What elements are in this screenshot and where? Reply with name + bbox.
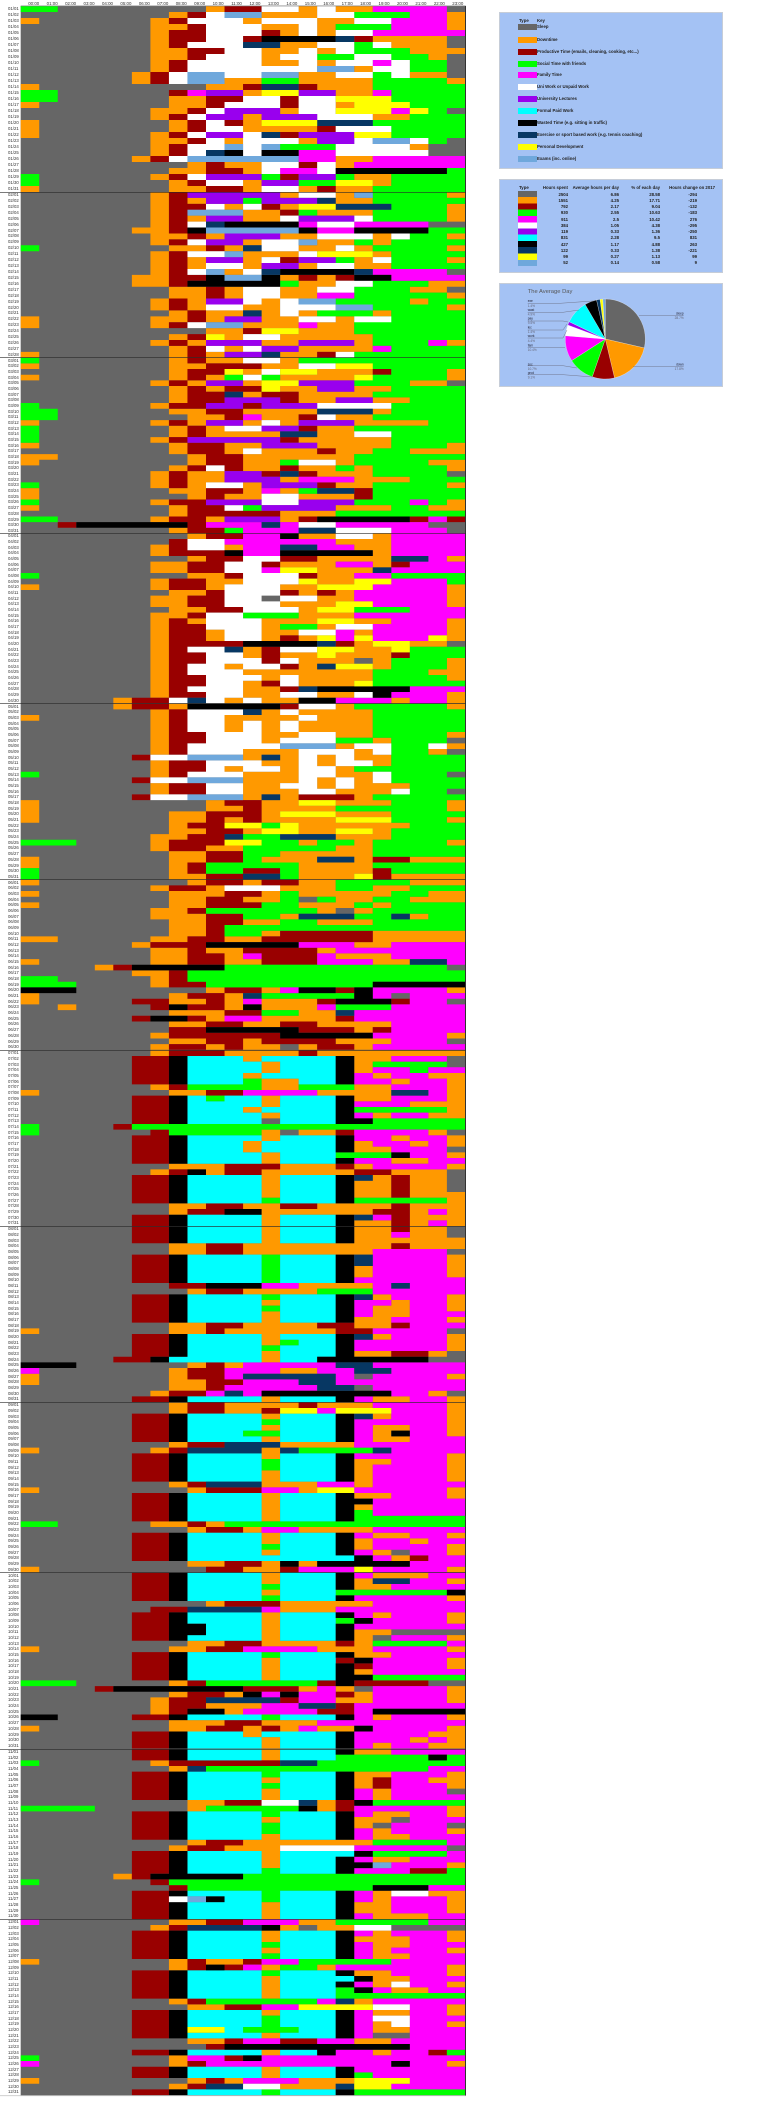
key entries: Formal Paid Work [537, 108, 573, 113]
table values [558, 192, 697, 265]
pie callout labels: 1.4% [528, 330, 535, 334]
date labels: February: 02/01 02/02 02/03 02/04 02/05 02/06 02/07 02/08 02/09 02/10 02/11 02/12 02/13 02/14 02/15 02/16 02/17 02/18 02/19 02/20 02/21 02/22 02/23 02/24 02/25 02/26 02/27 02/28 [8, 192, 19, 357]
pie callout labels: pay [528, 317, 533, 321]
table values: 6.86 4.25 2.17 2.55 2.5 1.05 0.33 2.28 1.17 0.33 0.27 0.14 [611, 192, 619, 265]
hour labels header: 23:00 [452, 1, 463, 6]
table values: -294 -219 -132 -183 276 -295 -250 831 263 -221 99 9 [688, 192, 697, 265]
pie callout labels: 1.4% [528, 304, 535, 308]
hour labels header: 18:00 [360, 1, 371, 6]
hour labels header: 06:00 [139, 1, 150, 6]
April rows [21, 536, 465, 701]
date labels: October: 10/01 10/02 10/03 10/04 10/05 10/06 10/07 10/08 10/09 10/10 10/11 10/12 10/13 10/14 10/15 10/16 10/17 10/18 10/19 10/20 10/21 10/22 10/23 10/24 10/25 10/26 10/27 10/28 10/29 10/30 10/31 [8, 1573, 19, 1748]
May rows [21, 707, 465, 877]
pie callout labels: 28.7% [675, 316, 684, 320]
hour labels header: 15:00 [305, 1, 316, 6]
hour labels header: 21:00 [415, 1, 426, 6]
pie callout labels: 4.9% [528, 312, 535, 316]
hour labels header: 04:00 [102, 1, 113, 6]
date labels: November: 11/01 11/02 11/03 11/04 11/05 11/06 11/07 11/08 11/09 11/10 11/11 11/12 11/13 11/14 11/15 11/16 11/17 11/18 11/19 11/20 11/21 11/22 11/23 11/24 11/25 11/26 11/27 11/28 11/29 11/30 [8, 1749, 18, 1918]
March rows [21, 361, 465, 531]
pie callout labels: exe [528, 299, 533, 303]
panel: statistics table [499, 179, 723, 273]
table values: 2504 1551 792 930 911 384 119 831 427 122 99 52 [558, 192, 568, 265]
key entries: Family Time [537, 72, 562, 77]
pie callout labels: 10.4% [528, 348, 537, 352]
hour labels header: 11:00 [231, 1, 242, 6]
date labels: January: 01/01 01/02 01/03 01/04 01/05 01/06 01/07 01/08 01/09 01/10 01/11 01/12 01/13 01/14 01/15 01/16 01/17 01/18 01/19 01/20 01/21 01/22 01/23 01/24 01/25 01/26 01/27 01/28 01/29 01/30 01/31 [8, 6, 19, 191]
October rows [21, 1570, 465, 1746]
pie callout labels: down [676, 362, 684, 366]
date labels: September: 09/01 09/02 09/03 09/04 09/05 09/06 09/07 09/08 09/09 09/10 09/11 09/12 09/13 09/14 09/15 09/16 09/17 09/18 09/19 09/20 09/21 09/22 09/23 09/24 09/25 09/26 09/27 09/28 09/29 09/30 [8, 1402, 19, 1572]
December rows [21, 1922, 465, 2092]
pie callout labels [528, 299, 684, 379]
pie callout labels: soc [528, 362, 533, 366]
hour labels header: 12:00 [249, 1, 260, 6]
hour labels header: 20:00 [397, 1, 408, 6]
date labels: April: 04/01 04/02 04/03 04/04 04/05 04/06 04/07 04/08 04/09 04/10 04/11 04/12 04/13 04/14 04/15 04/16 04/17 04/18 04/19 04/20 04/21 04/22 04/23 04/24 04/25 04/26 04/27 04/28 04/29 04/30 [8, 533, 19, 703]
table headings: Type [519, 185, 529, 190]
date labels: August: 08/01 08/02 08/03 08/04 08/05 08/06 08/07 08/08 08/09 08/10 08/11 08/12 08/13 08/14 08/15 08/16 08/17 08/18 08/19 08/20 08/21 08/22 08/23 08/24 08/25 08/26 08/27 08/28 08/29 08/30 08/31 [8, 1226, 19, 1401]
table swatches [518, 191, 537, 266]
table headings: Hours change on 2017 [669, 185, 715, 190]
panel: the average day [499, 283, 723, 387]
July rows [21, 1053, 465, 1223]
hour labels header: 22:00 [434, 1, 445, 6]
date labels: July: 07/01 07/02 07/03 07/04 07/05 07/06 07/07 07/08 07/09 07/10 07/11 07/12 07/13 07/14 07/15 07/16 07/17 07/18 07/19 07/20 07/21 07/22 07/23 07/24 07/25 07/26 07/27 07/28 07/29 07/30 07/31 [8, 1050, 19, 1225]
key heading: Type [519, 18, 529, 23]
hour labels header: 02:00 [65, 1, 76, 6]
pie callout labels: wast [528, 308, 534, 312]
November rows [21, 1746, 465, 1916]
hour labels header: 08:00 [176, 1, 187, 6]
key entries: Sleep [537, 24, 548, 29]
key heading [519, 18, 545, 23]
January rows [21, 9, 465, 189]
pie callout labels: sleep [676, 311, 684, 315]
hour labels header: 07:00 [157, 1, 168, 6]
key heading: Key [537, 18, 545, 23]
pie callout labels: prod [528, 371, 534, 375]
September rows [21, 1399, 465, 1570]
pie callout labels: 17.8% [675, 367, 684, 371]
key entries: Productive Time (emails, cleaning, cooking, etc...) [537, 49, 639, 54]
table headings [519, 185, 715, 190]
August rows [21, 1229, 465, 1399]
key entries [518, 24, 642, 162]
table headings: Hours spent [543, 185, 568, 190]
hour labels header: 00:00 [28, 1, 39, 6]
hour labels header: 19:00 [379, 1, 390, 6]
date labels: May: 05/01 05/02 05/03 05/04 05/05 05/06 05/07 05/08 05/09 05/10 05/11 05/12 05/13 05/14 05/15 05/16 05/17 05/18 05/19 05/20 05/21 05/22 05/23 05/24 05/25 05/26 05/27 05/28 05/29 05/30 05/31 [8, 704, 19, 879]
key entries: Personal Development [537, 144, 583, 149]
table headings: % of each day [631, 185, 660, 190]
key entries: Downtime [537, 37, 558, 42]
hour labels header: 14:00 [286, 1, 297, 6]
pie callout labels: lec [528, 326, 532, 330]
February rows [21, 195, 465, 355]
pie callout labels: 10.7% [528, 367, 537, 371]
table headings: Average hours per day [573, 185, 619, 190]
hour labels header: 16:00 [323, 1, 334, 6]
hour labels header: 17:00 [342, 1, 353, 6]
hour labels header: 01:00 [47, 1, 58, 6]
key entries: Uni Work or Unpaid Work [537, 84, 589, 89]
key entries: Social Time with friends [537, 61, 586, 66]
hour labels header: 10:00 [213, 1, 224, 6]
date labels: December: 12/01 12/02 12/03 12/04 12/05 12/06 12/07 12/08 12/09 12/10 12/11 12/12 12/13 12/14 12/15 12/16 12/17 12/18 12/19 12/20 12/21 12/22 12/23 12/24 12/25 12/26 12/27 12/28 12/29 12/30 12/31 [8, 1919, 19, 2094]
pie callout labels: 4.4% [528, 339, 535, 343]
panel: colour key [499, 12, 723, 169]
pie chart title: The Average Day [528, 289, 572, 295]
table values: 28.58 17.71 9.04 10.63 10.42 4.38 1.36 9.5 4.88 1.38 1.13 0.58 [649, 192, 660, 265]
pie callout labels: fam [528, 343, 533, 347]
hour labels header [28, 1, 464, 6]
pie callout labels: work [528, 334, 535, 338]
pie callout lines [528, 301, 684, 377]
date labels: March: 03/01 03/02 03/03 03/04 03/05 03/06 03/07 03/08 03/09 03/10 03/11 03/12 03/13 03/14 03/15 03/16 03/17 03/18 03/19 03/20 03/21 03/22 03/23 03/24 03/25 03/26 03/27 03/28 03/29 03/30 03/31 [8, 358, 19, 533]
hour labels header: 03:00 [84, 1, 95, 6]
key entries: University Lectures [537, 96, 577, 101]
hour labels header: 05:00 [120, 1, 131, 6]
key entries: Exercise or sport based work (e.g. tennis coaching) [537, 132, 642, 137]
date labels: June: 06/01 06/02 06/03 06/04 06/05 06/06 06/07 06/08 06/09 06/10 06/11 06/12 06/13 06/14 06/15 06/16 06/17 06/18 06/19 06/20 06/21 06/22 06/23 06/24 06/25 06/26 06/27 06/28 06/29 06/30 [8, 880, 19, 1049]
key entries: Exams (inc. online) [537, 156, 576, 161]
pie callout labels: 9.5% [528, 321, 535, 325]
June rows [21, 883, 465, 1047]
hour labels header: 09:00 [194, 1, 205, 6]
hour labels header: 13:00 [268, 1, 279, 6]
key entries: Wasted Time (e.g. sitting in traffic) [537, 120, 607, 125]
pie callout labels: 9.1% [528, 375, 535, 379]
